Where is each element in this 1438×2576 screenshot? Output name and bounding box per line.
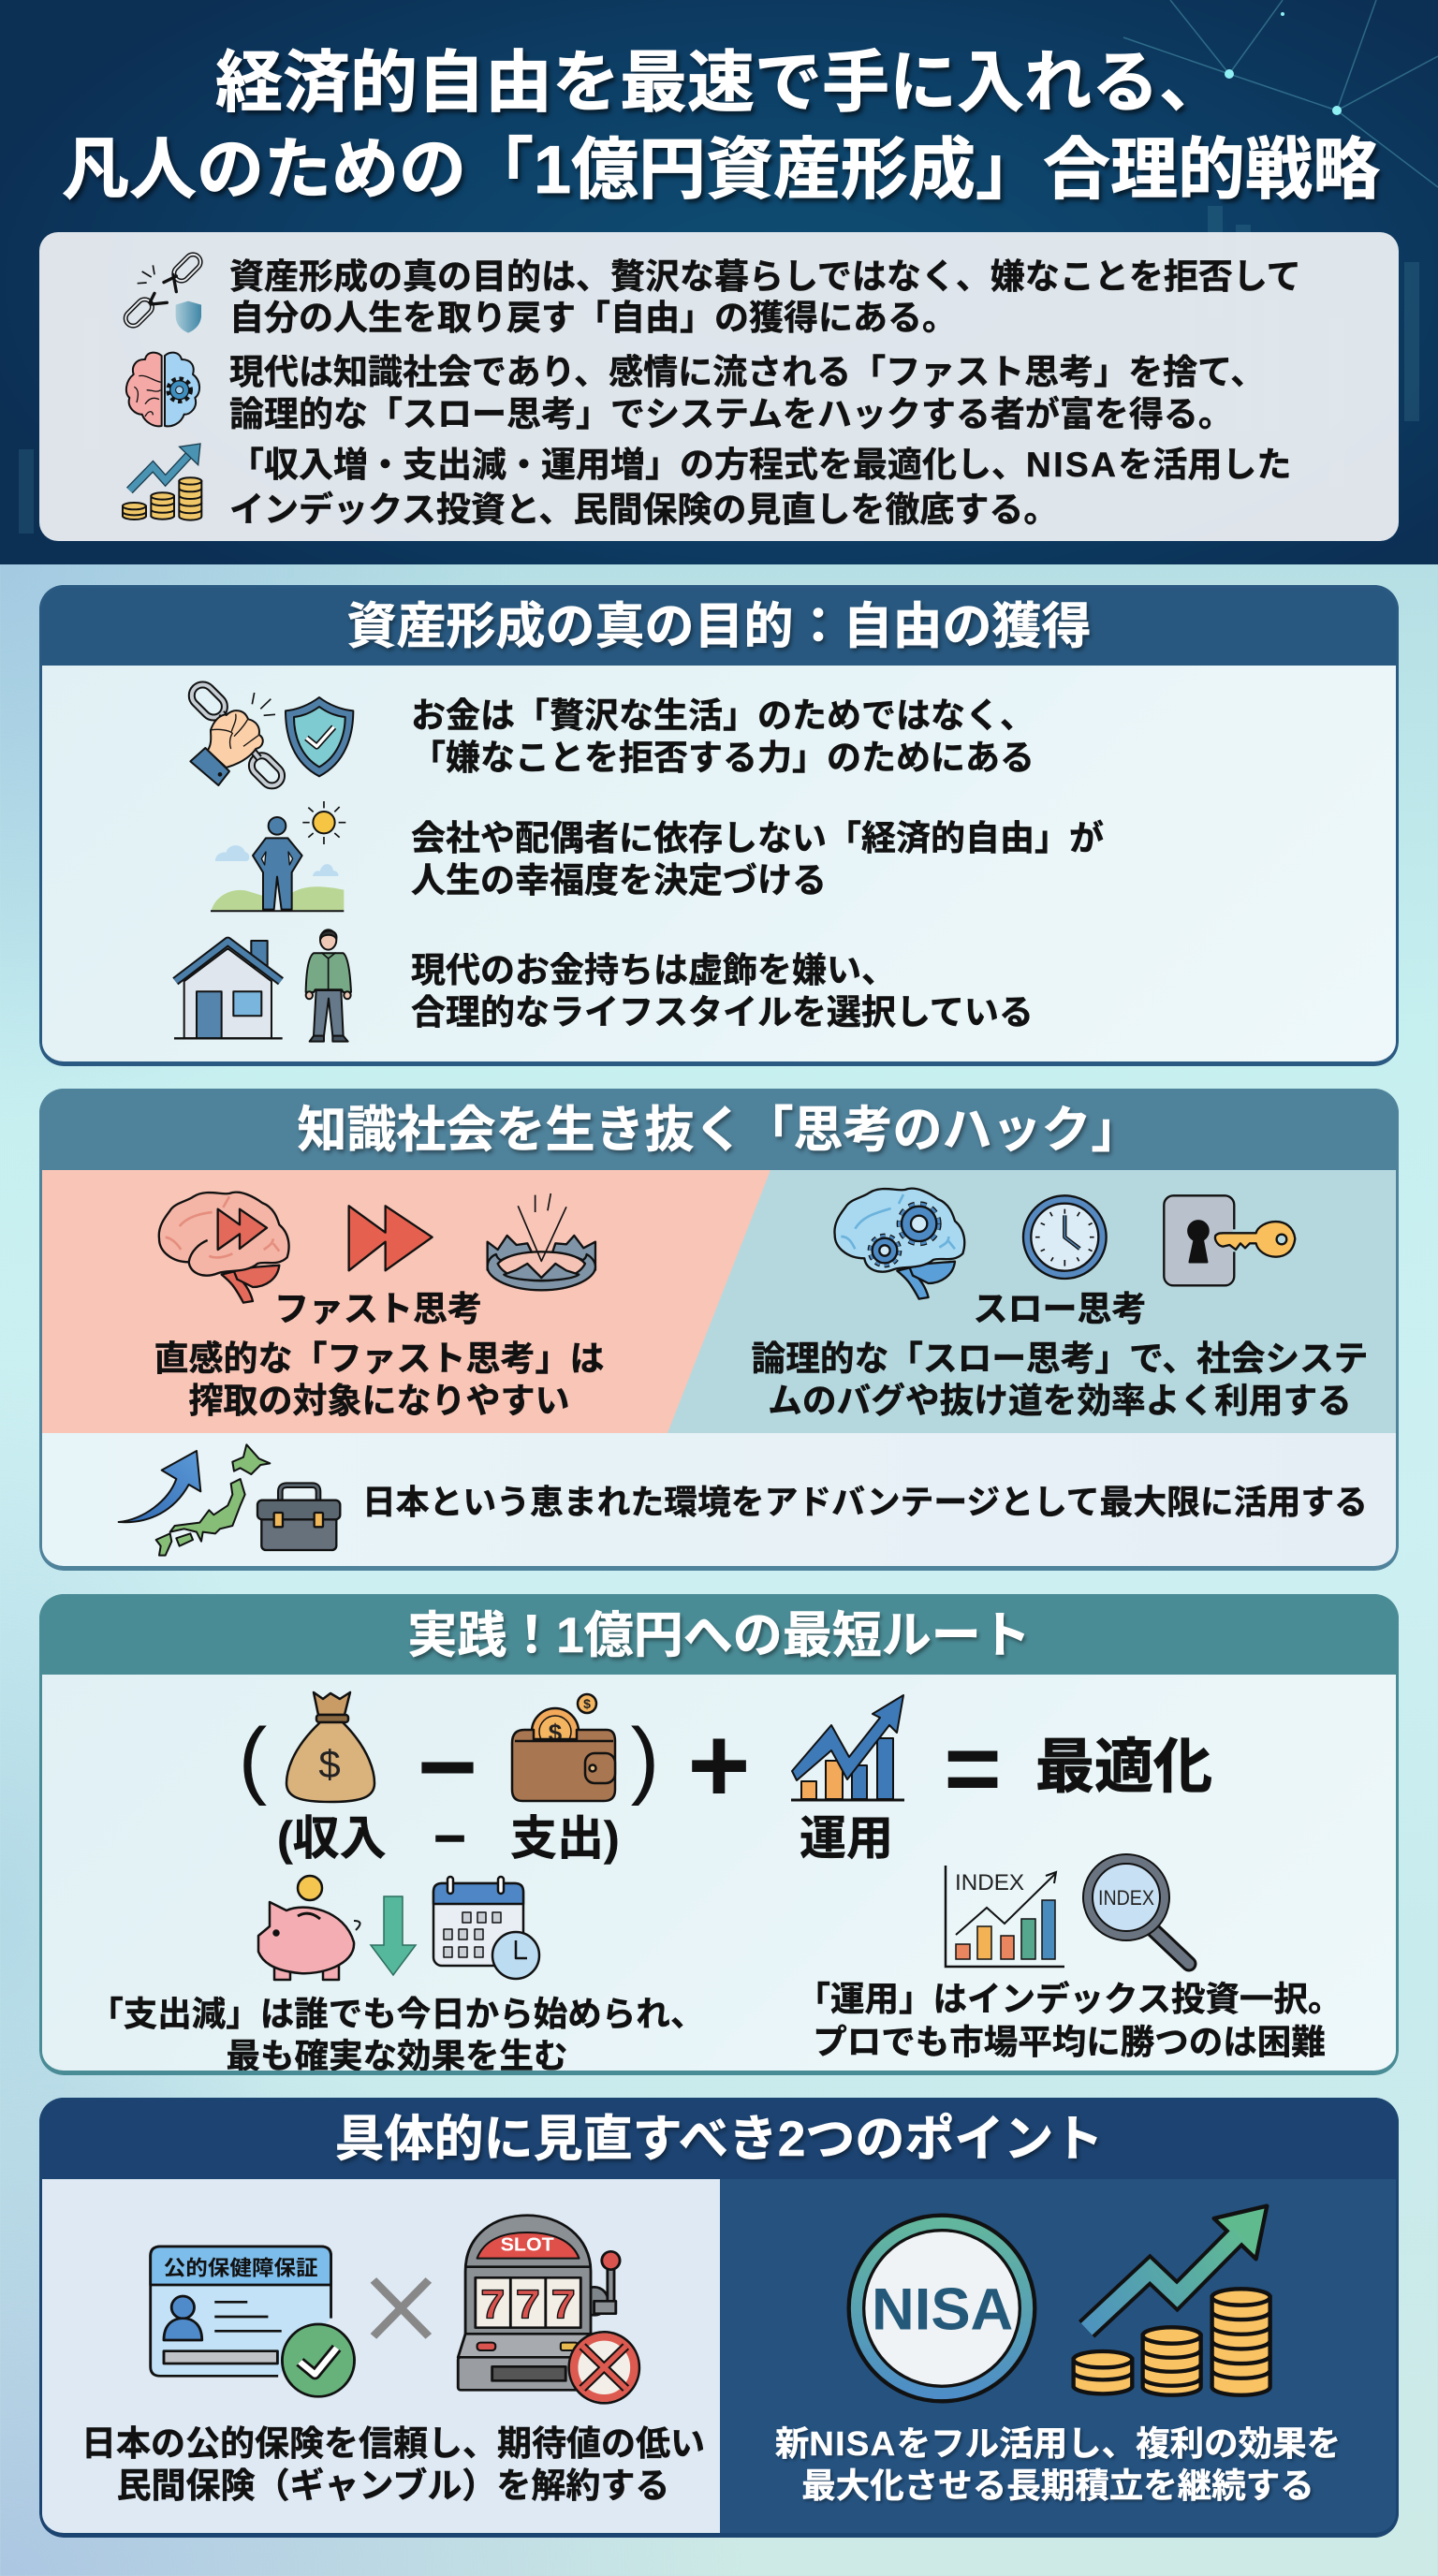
icon: NISA badge: NISA <box>872 2277 1013 2343</box>
icon: split brain <box>126 353 199 426</box>
japan advantage row <box>39 1433 1399 1571</box>
summary text 1: 自分の人生を取り戻す「自由」の獲得にある。 <box>229 299 957 337</box>
text: spending cut: 最も確実な効果を生む <box>227 2037 567 2075</box>
icon: slot machine <box>458 2216 639 2403</box>
icon: public insurance card: 公的保健障保証 <box>164 2256 318 2279</box>
equation labels: (収入 <box>277 1812 387 1865</box>
summary text 3 <box>229 446 1291 529</box>
icon: slot machine: 7 <box>516 2281 540 2327</box>
icon: modest house and man <box>174 929 351 1042</box>
icon: index chart <box>946 1866 1064 1967</box>
icon: slot machine: 7 <box>551 2281 576 2327</box>
icon: wallet with coins: $ <box>583 1696 591 1711</box>
heading: thinking hack: 知識社会を生き抜く「思考のハック」 <box>298 1103 1140 1158</box>
text: modern rich <box>411 951 1034 1032</box>
icon: keyhole and key <box>1164 1195 1295 1285</box>
equation labels <box>277 1807 893 1869</box>
title <box>62 46 1383 208</box>
icon: bear trap <box>488 1193 595 1290</box>
icon: map of japan <box>156 1444 270 1556</box>
heading: purpose: 資産形成の真の目的：自由の獲得 <box>346 599 1092 654</box>
icon: calendar and clock <box>433 1877 539 1979</box>
text: japan advantage: 日本という恵まれた環境をアドバンテージとして最大限に活用する <box>362 1484 1368 1521</box>
icon: slot machine: SLOT <box>501 2234 554 2255</box>
summary text 2: 現代は知識社会であり、感情に流される「ファスト思考」を捨て、 <box>229 353 1265 391</box>
heading: shortest route <box>39 1594 1399 1675</box>
panel: purpose of wealth building <box>39 585 1399 1066</box>
text: fast thinking description: 搾取の対象になりやすい <box>189 1382 569 1420</box>
icon: magnifier: INDEX <box>1098 1886 1154 1910</box>
equation symbols: ( <box>239 1711 268 1807</box>
icon: independent person under sun <box>211 801 345 911</box>
text: spending cut: 「支出減」は誰でも今日から始められ、 <box>89 1995 705 2033</box>
icon: money bag <box>286 1692 374 1802</box>
text: spending cut <box>89 1995 705 2075</box>
icon: down arrow <box>371 1896 416 1975</box>
text: money is the power to refuse: 「嫌なことを拒否する力」のためにある <box>411 739 1034 777</box>
icon: piggy bank <box>258 1876 360 1980</box>
heading: thinking hack <box>39 1089 1399 1170</box>
text: economic freedom: 会社や配偶者に依存しない「経済的自由」が <box>411 819 1104 857</box>
icon: slow brain with gears <box>834 1189 964 1299</box>
text: new NISA advice <box>775 2424 1341 2505</box>
equation symbols: ) <box>631 1711 659 1807</box>
equation symbols: = <box>944 1714 1002 1823</box>
title: 凡人のための「1億円資産形成」合理的戦略 <box>62 133 1380 208</box>
text: money is the power to refuse: お金は「贅沢な生活」のためではなく、 <box>411 696 1034 735</box>
text: slow thinking description: 論理的な「スロー思考」で、社会システ <box>752 1339 1368 1378</box>
text: fast thinking description: 直感的な「ファスト思考」は <box>154 1339 605 1378</box>
heading: two points: 具体的に見直すべき2つのポイント <box>335 2112 1103 2167</box>
text: index investing <box>797 1980 1342 2061</box>
text: index investing: プロでも市場平均に勝つのは困難 <box>813 2023 1326 2061</box>
icon: briefcase <box>257 1486 340 1550</box>
text: index investing: 「運用」はインデックス投資一択。 <box>797 1980 1342 2018</box>
text: economic freedom <box>411 819 1104 900</box>
text: public insurance advice: 日本の公的保険を信頼し、期待値の低い <box>81 2424 705 2463</box>
equation symbols <box>239 1705 1002 1825</box>
icon: wallet with coins <box>512 1694 615 1801</box>
text: public insurance advice <box>81 2424 705 2505</box>
panel: summary <box>39 232 1399 541</box>
text: modern rich: 合理的なライフスタイルを選択している <box>411 993 1034 1032</box>
heading: shortest route: 実践！1億円への最短ルート <box>407 1608 1031 1663</box>
equation symbols: + <box>687 1705 751 1825</box>
left column background <box>39 2179 720 2538</box>
icon: money bag: $ <box>318 1742 341 1786</box>
text: fast thinking label: ファスト思考 <box>274 1290 482 1328</box>
icon: clock <box>1023 1195 1107 1279</box>
panel: shortest route <box>39 1594 1399 2075</box>
text: optimization: 最適化 <box>1035 1734 1212 1800</box>
text: public insurance advice: 民間保険（ギャンブル）を解約する <box>117 2466 669 2505</box>
icon: rising arrow <box>119 1451 200 1522</box>
icon: public insurance card <box>151 2247 355 2396</box>
equation labels: 支出) <box>510 1812 620 1865</box>
equation labels: 運用 <box>800 1812 893 1865</box>
icon: fast brain <box>159 1193 289 1303</box>
text: slow thinking description <box>752 1339 1368 1420</box>
icon: index chart: INDEX <box>955 1870 1024 1895</box>
icon: investment chart <box>791 1695 904 1800</box>
icon: magnifier <box>1083 1854 1189 1964</box>
equation symbols: − <box>418 1709 477 1824</box>
text: fast thinking description <box>154 1339 605 1420</box>
slow thinking background <box>42 1170 770 1433</box>
summary text 1 <box>229 257 1301 337</box>
text: slow thinking description: ムのバグや抜け道を効率よく利用する <box>768 1382 1352 1420</box>
icon: wallet with coins: $ <box>549 1719 563 1747</box>
icon: slot machine: 7 <box>480 2281 505 2327</box>
icon: rising chart and coins <box>123 444 201 520</box>
title: 経済的自由を最速で手に入れる、 <box>215 46 1226 121</box>
fast thinking background <box>39 1170 1399 1433</box>
text: new NISA advice: 新NISAをフル活用し、複利の効果を <box>775 2424 1341 2463</box>
heading: two points <box>39 2098 1399 2179</box>
equation labels: − <box>433 1807 466 1869</box>
icon: cross between card and slot <box>374 2280 429 2336</box>
heading: purpose <box>39 585 1399 666</box>
text: modern rich: 現代のお金持ちは虚飾を嫌い、 <box>411 951 896 989</box>
header background <box>0 0 1438 564</box>
icon: NISA badge <box>849 2216 1034 2401</box>
text: new NISA advice: 最大化させる長期積立を継続する <box>801 2466 1314 2505</box>
summary text 2 <box>229 353 1265 433</box>
summary text 3: インデックス投資と、民間保険の見直しを徹底する。 <box>229 490 1058 529</box>
summary text 3: 「収入増・支出減・運用増」の方程式を最適化し、NISAを活用した <box>229 446 1291 484</box>
text: money is the power to refuse <box>411 696 1034 777</box>
text: economic freedom: 人生の幸福度を決定づける <box>411 861 827 900</box>
text: slow thinking label: スロー思考 <box>974 1290 1146 1328</box>
right column background <box>720 2179 1399 2538</box>
icon: fist with chain and shield <box>187 681 353 790</box>
summary text 1: 資産形成の真の目的は、贅沢な暮らしではなく、嫌なことを拒否して <box>229 257 1301 296</box>
icon: growth arrow and coin stacks <box>1074 2206 1270 2395</box>
summary text 2: 論理的な「スロー思考」でシステムをハックする者が富を得る。 <box>229 395 1233 433</box>
icon: fast forward arrows <box>349 1206 433 1270</box>
panel: two points to review <box>39 2098 1399 2538</box>
panel: thinking hack <box>39 1089 1399 1571</box>
icon: broken chain and shield <box>123 252 203 333</box>
